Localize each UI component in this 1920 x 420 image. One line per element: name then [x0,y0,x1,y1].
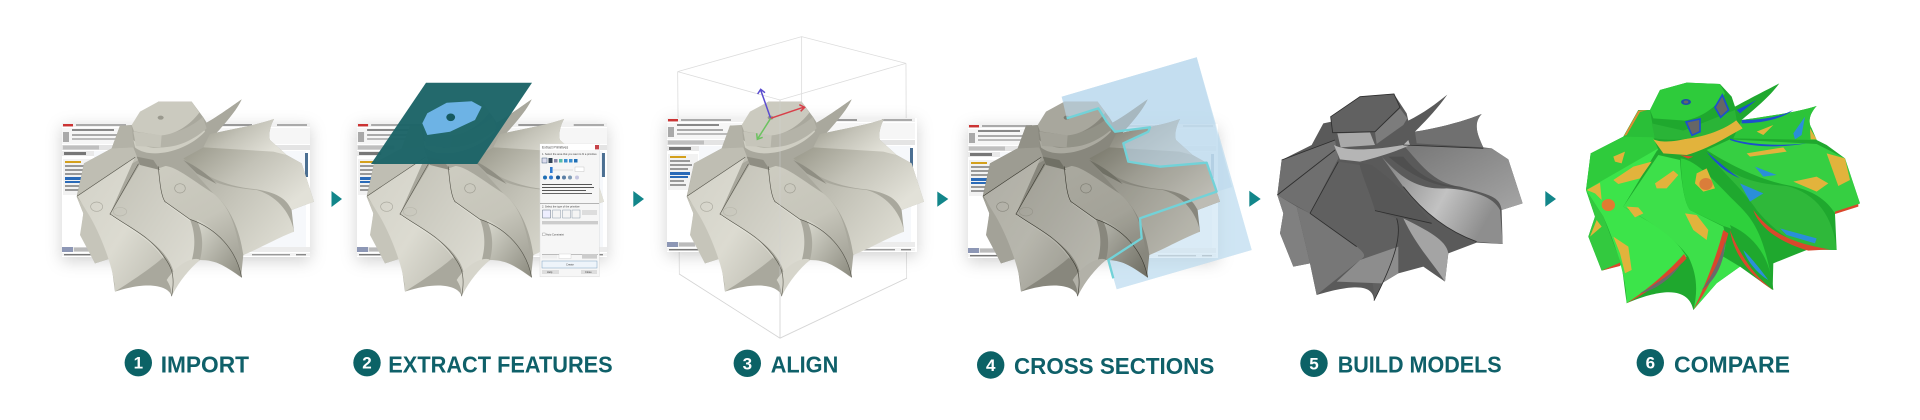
green silhouette [1586,83,1860,310]
blade faces [1623,110,1655,138]
front blades [1310,162,1398,301]
extract primitives dialog: Auto Constraint [546,232,564,236]
red deviation hot spots and edges [1602,110,1858,310]
extract primitives dialog: 1. Select the area that you want to fit a primitive [542,152,597,156]
impeller scan [983,99,1220,297]
grey out-of-range areas [1640,240,1725,293]
coordinate axes [757,89,805,139]
tinted plane over window [1062,57,1252,289]
panel: step 5 build models [1277,94,1523,301]
selected hub face [422,101,482,135]
hub collar [1653,117,1743,155]
panel: step 3 align [667,37,924,338]
heading: 3 align [734,350,838,378]
hub [1652,110,1737,140]
bounding box front edge [679,100,907,338]
heading: 6 compare: COMPARE [1674,352,1790,378]
heading: 1 import: 1 [134,354,143,373]
extract primitives dialog: 2. Select the type of the primitive [542,204,580,208]
cad silhouette [1277,94,1523,301]
arrow 1 [332,191,342,207]
arrow 4 [1249,191,1261,207]
heading: 5 build models: BUILD MODELS [1338,352,1502,378]
upper blades [1415,114,1483,147]
extract primitives dialog: Help [547,270,553,274]
panel: step 6 compare deviation map [1586,83,1860,310]
heading: 3 align: 3 [743,354,752,373]
software window [968,124,1218,258]
heading: 4 cross sections: 4 [986,356,996,375]
extract primitives dialog: Extract Primitives [542,146,568,150]
heading: 2 extract features: EXTRACT FEATURES [388,352,613,378]
heading: 6 compare: 6 [1646,354,1655,373]
blue deviation areas [1740,117,1817,280]
panel: step 4 cross sections [968,57,1252,297]
hub [1334,140,1410,162]
panel: step 1 import [62,99,314,297]
panel: step 2 extract features [357,83,607,297]
bounding box back edges [678,37,907,338]
heading: 5 build models: 5 [1309,354,1319,373]
impeller scan [77,99,314,297]
impeller scan [367,99,604,297]
extract primitives dialog: Create [566,262,574,266]
heading: 1 import: IMPORT [161,352,249,378]
plane over upper blades [1062,57,1232,192]
arrow 5 [1545,191,1556,207]
software window [62,123,310,257]
heading: 1 import [125,349,249,378]
heading: 6 compare [1637,349,1790,378]
software window [667,118,917,252]
heading: 4 cross sections: CROSS SECTIONS [1014,353,1214,379]
extract primitives dialog: Close [585,270,592,274]
heading: 3 align: ALIGN [771,352,838,378]
orange deviation patches [1587,117,1850,273]
software window [357,123,607,257]
arrow 2 [633,191,644,207]
section curve [1067,108,1217,278]
extract primitives dialog [540,144,599,277]
arrow 3 [937,192,948,207]
impeller scan [687,99,924,297]
heading: 2 extract features: 2 [362,354,372,373]
feature plane [371,83,532,164]
edge lines [1277,94,1483,301]
section plane [1062,57,1252,289]
